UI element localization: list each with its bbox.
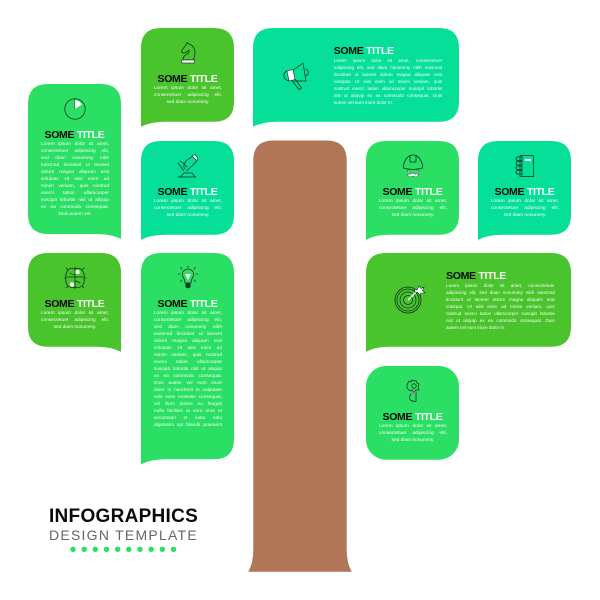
text block: nisl ut aliquip ex ea commodo consequat. Duis	[334, 93, 442, 98]
text block	[41, 310, 109, 330]
text block: tincidunt ut laoreet dolore magna aliquam erat	[334, 72, 442, 77]
text block	[154, 310, 222, 429]
text block: autem vel eum iriure dolor in.	[446, 325, 505, 330]
heading: SOME TITLE	[446, 270, 506, 282]
icon: microscope	[178, 154, 198, 178]
icon: target and dart	[394, 286, 426, 314]
text block: Lorem ipsum dolor sit amet,	[491, 198, 559, 204]
text block: minim veniam, quis nostrud	[41, 184, 109, 189]
text block: consectetuer adipiscing elit,	[41, 318, 109, 323]
text block: Lorem ipsum dolor sit amet,	[379, 198, 447, 204]
text block	[41, 142, 109, 217]
icon: notebook	[516, 155, 534, 177]
text block: sed diam nonummy.	[167, 100, 209, 105]
text block: consectetuer adipiscing elit,	[491, 206, 559, 210]
panel: pie chart	[28, 84, 121, 239]
icon: hand with gear	[406, 380, 420, 402]
text block: adipiscing elit, sed diam nonummy nibh euismod	[446, 290, 555, 295]
text block: sed diam nonummy.	[392, 438, 434, 443]
heading: SOME TITLE	[382, 186, 442, 198]
text block	[446, 283, 555, 330]
text block: sed diam nonummy.	[504, 212, 546, 218]
text block: Lorem ipsum dolor sit amet, consectetuer	[334, 58, 442, 63]
text block	[154, 86, 222, 105]
text block: volutpat. Ut wisi enim ad minim veniam, quis	[334, 79, 442, 84]
text block: dignissim qui blandit praesent	[154, 423, 222, 428]
text block: consectetuer adipiscing elit,	[41, 149, 109, 154]
dots row	[49, 545, 199, 555]
text block: consectetuer adipiscing elit,	[154, 318, 222, 323]
text block: sed diam nonummy nibh	[41, 156, 109, 161]
heading: SOME TITLE	[494, 186, 554, 198]
text block: Lorem ipsum dolor sit amet,	[41, 142, 109, 147]
icon: chess knight	[181, 42, 196, 64]
text block: ex ea commodo consequat.	[41, 205, 109, 210]
text block: consectetuer adipiscing elit,	[379, 431, 447, 436]
text block: Lorem ipsum dolor sit amet,	[41, 311, 109, 316]
panel: light bulb	[141, 253, 234, 464]
icon: helmet and gear	[403, 154, 423, 178]
text block: dolore magna aliquam erat	[41, 170, 109, 175]
main title: INFOGRAPHICS	[49, 506, 198, 526]
text block: consectetuer adipiscing elit,	[154, 206, 222, 210]
text block	[491, 198, 559, 218]
heading: SOME TITLE	[157, 186, 218, 198]
heading: SOME TITLE	[44, 129, 104, 141]
text block	[379, 424, 447, 443]
panel: megaphone	[253, 28, 459, 127]
text block: autem vel eum iriure dolor in.	[334, 100, 393, 105]
text block: euismod tincidunt ut laoreet	[154, 332, 222, 337]
text block: sed diam nonummy.	[54, 325, 96, 330]
text block: ex ea commodo consequat.	[154, 374, 222, 379]
text block: adipiscing elit, sed diam nonummy nibh euismod	[334, 65, 442, 70]
text block: dolore magna aliquam erat	[154, 339, 222, 344]
text block: Lorem ipsum dolor sit amet,	[379, 424, 447, 429]
text block	[154, 198, 222, 218]
title block	[49, 505, 199, 555]
icon: megaphone	[283, 62, 309, 90]
text block: nostrud exerci tation ullamcorper suscipit lobortis	[334, 86, 442, 91]
text block: volutpat. Ut wisi enim ad	[41, 177, 109, 182]
panel: hand with gear	[366, 366, 459, 460]
text block: exerci tation ullamcorper	[154, 360, 222, 365]
text block: Duis autem vel.	[58, 212, 92, 217]
heading: SOME TITLE	[334, 45, 394, 57]
panel: notebook	[478, 141, 571, 240]
panel: helmet	[366, 141, 459, 240]
text block: consectetuer adipiscing elit,	[379, 206, 447, 210]
text block: dolor in hendrerit in vulputate	[154, 388, 222, 393]
text block: Duis autem vel eum iriure	[154, 381, 222, 386]
text block: nulla facilisis at vero eros et	[154, 409, 222, 414]
text block: Lorem ipsum dolor sit amet, consectetuer	[446, 283, 555, 288]
text block: Lorem ipsum dolor sit amet,	[154, 311, 222, 316]
heading: SOME TITLE	[44, 298, 104, 310]
text block: suscipit lobortis nisl ut aliquip	[154, 367, 222, 372]
text block: suscipit lobortis nisl ut aliquip	[41, 198, 109, 203]
text block: euismod tincidunt ut laoreet	[41, 163, 109, 168]
text block	[379, 198, 447, 218]
text block: nostrud exerci tation ullamcorper suscipit lobortis	[446, 311, 555, 316]
heading: SOME TITLE	[157, 298, 218, 310]
panel: knight	[141, 28, 234, 127]
text block: volutpat. Ut wisi enim ad	[154, 346, 222, 351]
text block: consectetuer adipiscing elit,	[154, 93, 222, 98]
panel: target	[366, 253, 571, 352]
panel: microscope	[141, 141, 234, 240]
text block: Lorem ipsum dolor sit amet,	[154, 86, 222, 91]
text block: vel illum dolore eu feugiat	[154, 402, 222, 407]
text block: nisl ut aliquip ex ea commodo consequat. Duis	[446, 318, 555, 323]
text block: velit esse molestie consequat,	[154, 395, 222, 400]
heading: SOME TITLE	[157, 73, 218, 85]
text block: minim veniam, quis nostrud	[154, 353, 222, 358]
text block: accumsan et iusto odio	[154, 416, 222, 421]
text block: exerci tation ullamcorper	[41, 191, 109, 196]
heading: SOME TITLE	[382, 411, 442, 423]
icon: pie chart	[64, 98, 86, 120]
trunk	[248, 140, 352, 572]
text block: sed diam nonummy nibh	[154, 325, 222, 330]
icon: light bulb	[178, 266, 198, 288]
text block: tincidunt ut laoreet dolore magna aliquam erat	[446, 297, 555, 302]
text block: Lorem ipsum dolor sit amet,	[154, 198, 222, 204]
subtitle: DESIGN TEMPLATE	[49, 526, 198, 542]
icon: brain circuit	[64, 266, 86, 290]
text block: volutpat. Ut wisi enim ad minim veniam, quis	[446, 304, 555, 309]
panel: brain	[28, 253, 121, 352]
text block: sed diam nonummy.	[167, 212, 209, 218]
text block	[334, 58, 442, 105]
text block: sed diam nonummy.	[392, 212, 434, 218]
